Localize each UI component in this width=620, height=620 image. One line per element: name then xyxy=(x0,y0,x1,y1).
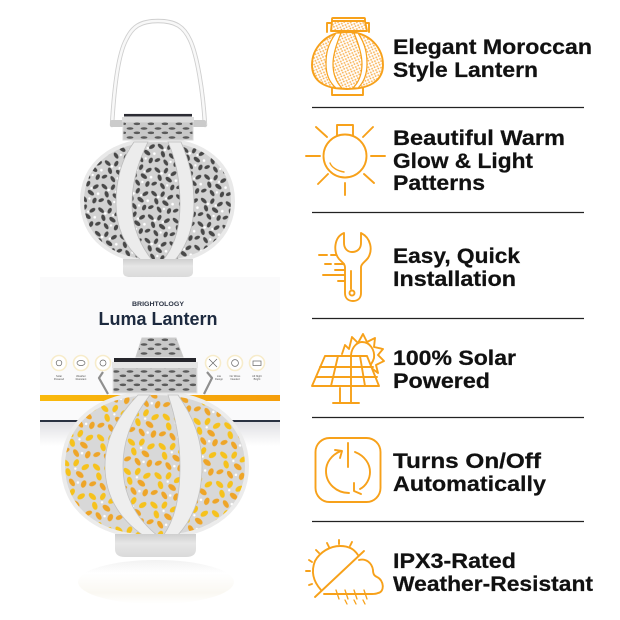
lantern reflection xyxy=(78,560,234,604)
feature: warm glow: Patterns xyxy=(393,171,485,195)
box lantern cap xyxy=(136,338,183,357)
lantern handle xyxy=(112,21,205,125)
feature: warm glow xyxy=(306,125,565,195)
heading: Easy, Quick xyxy=(393,244,520,268)
icon: half sun and rain cloud xyxy=(306,540,383,604)
feature: elegant moroccan lantern xyxy=(312,18,592,95)
icon: power with cycle arrows xyxy=(316,438,380,502)
feature: easy installation: Installation xyxy=(393,267,516,291)
box stripe xyxy=(40,395,280,401)
feature: turns on/off: Automatically xyxy=(393,472,546,496)
lantern: daytime xyxy=(82,21,233,277)
lantern body xyxy=(82,140,233,262)
lantern base xyxy=(115,534,196,557)
feature: solar powered xyxy=(312,334,517,403)
icon: bulb with rays xyxy=(306,125,385,195)
lantern base xyxy=(123,259,193,277)
icon: lantern xyxy=(312,18,383,95)
box feature icons: Powered xyxy=(54,377,65,381)
box feature icons: Lite xyxy=(217,374,222,378)
lantern cap xyxy=(123,122,193,140)
lantern side handles xyxy=(99,372,212,394)
feature: weather resistant xyxy=(306,540,593,604)
box feature icons: Resistant xyxy=(76,377,87,381)
box feature icons: Bright xyxy=(254,377,261,381)
feature: turns on/off xyxy=(316,438,546,502)
feature: warm glow: Glow & Light xyxy=(393,149,533,173)
box feature icons: Design xyxy=(215,377,224,381)
box product title: Luma Lantern xyxy=(98,309,218,329)
feature: solar powered: Powered xyxy=(393,369,490,393)
box feature icons: All Night xyxy=(252,374,262,378)
heading: Elegant Moroccan xyxy=(393,35,592,59)
icon: solar panel and sun xyxy=(312,334,384,403)
feature: weather resistant: Weather-Resistant xyxy=(393,572,593,596)
heading: Beautiful Warm xyxy=(393,126,565,150)
box feature icons: Weather xyxy=(76,374,86,378)
box feature icons: No Wires xyxy=(230,374,241,378)
lantern body xyxy=(63,393,247,537)
box feature icons xyxy=(52,356,264,381)
lantern cap xyxy=(113,366,197,393)
icon: wrench with speed lines xyxy=(319,233,371,301)
heading: 100% Solar xyxy=(393,346,517,370)
lantern: glowing xyxy=(63,358,247,604)
box feature icons: Solar xyxy=(56,374,62,378)
feature: elegant moroccan lantern: Style Lantern xyxy=(393,58,538,82)
feature: easy installation xyxy=(319,233,520,301)
heading: IPX3-Rated xyxy=(393,549,516,573)
box brand name: BRIGHTOLOGY xyxy=(132,301,185,308)
heading: Turns On/Off xyxy=(393,449,542,473)
box feature icons: Needed xyxy=(230,377,240,381)
product box xyxy=(40,277,280,446)
